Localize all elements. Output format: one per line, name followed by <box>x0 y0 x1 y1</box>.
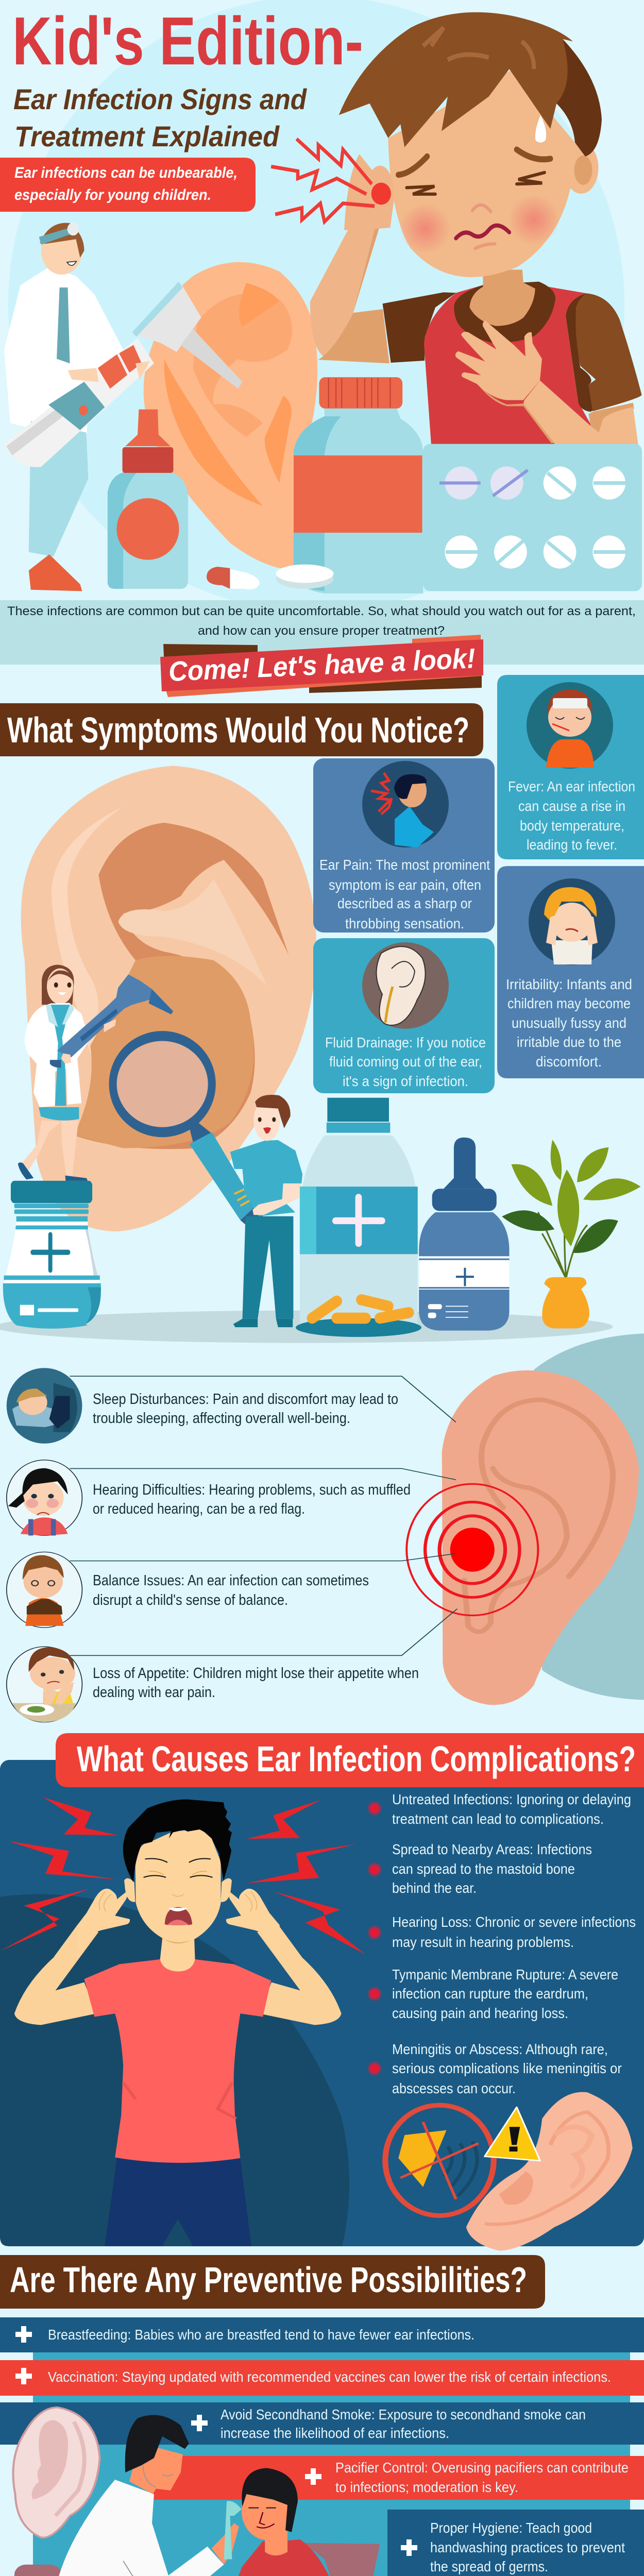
illustration: boy covering ears <box>0 1798 365 2246</box>
text: spread: can spread to the mastoid bone <box>392 1861 575 1877</box>
text: loss of appetite: Loss of Appetite: Children might lose their appetite when <box>93 1665 419 1682</box>
panel: irritability <box>497 866 644 1078</box>
hero illustration <box>4 12 642 594</box>
text: ear pain: symptom is ear pain, often <box>329 877 481 893</box>
icon: blister pack <box>423 444 642 591</box>
boy head, hands and right bolts <box>77 1800 365 1972</box>
text: hearing loss: may result in hearing problems. <box>392 1934 574 1950</box>
text: meningitis: abscesses can occur. <box>392 2080 516 2096</box>
icon: irritable child <box>529 878 615 965</box>
text: irritability: Irritability: Infants and <box>506 976 632 992</box>
icon: dropper bottle <box>108 410 188 589</box>
icon: blue dropper <box>419 1138 510 1331</box>
text: fluid drainage <box>325 1035 486 1089</box>
text: balance issues: Balance Issues: An ear infection can sometimes <box>93 1572 369 1589</box>
icon: hearing <box>7 1460 82 1536</box>
subtitle <box>13 83 308 152</box>
text: fever <box>508 778 635 853</box>
icon: ear pain <box>362 761 449 848</box>
bar: vaccination <box>0 2360 644 2396</box>
text: balance issues <box>93 1572 369 1608</box>
text: spread: Spread to Nearby Areas: Infections <box>392 1841 592 1857</box>
icon: bottle left <box>3 1181 101 1329</box>
text: hearing loss <box>392 1914 636 1950</box>
text: untreated infections: treatment can lead to complications. <box>392 1811 604 1827</box>
boy torso and hand on chest <box>383 269 642 445</box>
text: sleep disturbances: Sleep Disturbances: Pain and discomfort may lead to <box>93 1391 398 1408</box>
icon: large ear <box>144 262 317 570</box>
bar: secondhand smoke: Avoid Secondhand Smoke: Exposure to secondhand smoke can <box>221 2406 586 2422</box>
illustration: pediatric ear exam <box>13 2408 637 2576</box>
text: rupture <box>392 1967 618 2021</box>
text: fever: body temperature, <box>520 818 624 834</box>
text: irritability <box>506 976 632 1070</box>
stool <box>14 2565 162 2576</box>
icon: sleep <box>7 1368 82 1444</box>
icon: ear with no-sound warning <box>385 2092 633 2251</box>
bar: breastfeeding <box>0 2317 644 2352</box>
box: proper hygiene: the spread of germs. <box>430 2558 548 2574</box>
box: proper hygiene: Proper Hygiene: Teach good <box>430 2520 592 2536</box>
text: loss of appetite <box>93 1665 419 1701</box>
panel: intro band: and how can you ensure proper treatment? <box>198 624 445 638</box>
callout: unbearable: Ear infections can be unbearable, <box>14 164 238 181</box>
panel: intro band: These infections are common but can be quite uncomfortable. So, what should you watch out for as a parent, <box>7 604 636 618</box>
icon: plant <box>502 1140 641 1328</box>
panel: symptoms illustration <box>0 766 641 1343</box>
subtitle: Treatment Explained <box>14 120 280 152</box>
panel: hero <box>4 0 642 612</box>
text: meningitis <box>392 2041 622 2096</box>
icon: ear with target <box>406 1333 644 1705</box>
panel: ear pain <box>313 758 495 933</box>
text: balance issues: disrupt a child's sense of balance. <box>93 1592 288 1608</box>
text: ear pain: throbbing sensation. <box>345 916 464 931</box>
banner: come have a look <box>160 635 483 697</box>
text: sleep disturbances: trouble sleeping, affecting overall well-being. <box>93 1410 350 1427</box>
bar: secondhand smoke <box>0 2402 644 2445</box>
icon: big ear <box>21 766 316 1231</box>
title: Kid's Edition- <box>12 3 363 79</box>
text: meningitis: serious complications like meningitis or <box>392 2060 622 2076</box>
doctor with otoscope <box>4 223 242 591</box>
text: sleep disturbances <box>93 1391 398 1427</box>
text: fluid drainage: Fluid Drainage: If you notice <box>325 1035 486 1050</box>
text: hearing difficulties: Hearing Difficulties: Hearing problems, such as muffled <box>93 1482 411 1498</box>
icon: large bottle <box>296 1098 421 1337</box>
text: spread <box>392 1841 592 1896</box>
boy holding ear <box>271 12 642 445</box>
icon: medicine jar <box>294 377 423 594</box>
panel: intro band <box>0 600 644 665</box>
man with magnifier <box>230 1095 302 1327</box>
bar: pacifier control <box>149 2456 644 2500</box>
callout: unbearable <box>0 158 256 212</box>
heading: preventive <box>0 2255 545 2309</box>
banner: come have a look: Come! Let's have a look! <box>168 643 476 687</box>
doctor <box>52 2415 244 2576</box>
panel: clinic backdrop <box>33 2349 630 2576</box>
shadow <box>0 1311 613 1343</box>
icon: balance <box>7 1552 82 1628</box>
text: untreated infections <box>392 1791 631 1827</box>
bullets: red dots <box>367 1801 382 2076</box>
subtitle: Ear Infection Signs and <box>13 83 308 115</box>
panel: complications <box>0 1760 644 2251</box>
icon: appetite <box>7 1647 82 1722</box>
icon: magnifying glass <box>113 1036 263 1228</box>
text: ear pain: described as a sharp or <box>337 895 472 911</box>
connector lines <box>70 1376 457 1655</box>
bar: pacifier control: to infections; moderation is key. <box>335 2479 518 2495</box>
text: spread: behind the ear. <box>392 1880 477 1896</box>
text: rupture: Tympanic Membrane Rupture: A severe <box>392 1967 618 1982</box>
text: irritability: irritable due to the <box>517 1034 621 1050</box>
box: proper hygiene: handwashing practices to prevent <box>430 2539 625 2555</box>
text: hearing difficulties: or reduced hearing, can be a red flag. <box>93 1501 305 1517</box>
icon: fever child <box>527 682 613 769</box>
heading: symptoms <box>0 703 483 756</box>
panel: other symptoms diagram <box>7 1333 644 1722</box>
text: rupture: causing pain and hearing loss. <box>392 2005 568 2021</box>
text: ear pain: Ear Pain: The most prominent <box>319 857 490 873</box>
child <box>173 2468 341 2576</box>
text: ear pain <box>319 857 490 931</box>
text: fluid drainage: it's a sign of infection. <box>343 1073 468 1089</box>
text: rupture: infection can rupture the eardrum, <box>392 1986 588 2002</box>
woman doctor <box>18 965 173 1181</box>
text: loss of appetite: dealing with ear pain. <box>93 1684 215 1701</box>
text: fever: leading to fever. <box>527 837 617 853</box>
text: fluid drainage: fluid coming out of the ear, <box>329 1054 482 1070</box>
text: irritability: children may become <box>507 995 631 1011</box>
text: fever: can cause a rise in <box>518 798 625 814</box>
bar: secondhand smoke: increase the likelihood of ear infections. <box>221 2425 449 2441</box>
doctor, magnifier, man and bottle <box>3 965 302 1329</box>
text: hearing difficulties <box>93 1482 411 1517</box>
callout: unbearable: especially for young children. <box>14 187 211 204</box>
chair <box>228 2543 380 2576</box>
panel: fluid drainage <box>313 938 495 1093</box>
text: meningitis: Meningitis or Abscess: Although rare, <box>392 2041 608 2057</box>
icon: pale ear <box>13 2408 100 2537</box>
text: irritability: unusually fussy and <box>512 1015 626 1031</box>
heading: symptoms: What Symptoms Would You Notice? <box>7 710 469 750</box>
panel: fever <box>497 675 644 859</box>
bar: breastfeeding: Breastfeeding: Babies who are breastfed tend to have fewer ear infections. <box>48 2327 474 2343</box>
box: proper hygiene <box>387 2510 644 2576</box>
icon: ear with fluid <box>362 942 449 1029</box>
text: irritability: discomfort. <box>536 1054 602 1070</box>
icon: capsule and tablet <box>207 565 333 589</box>
